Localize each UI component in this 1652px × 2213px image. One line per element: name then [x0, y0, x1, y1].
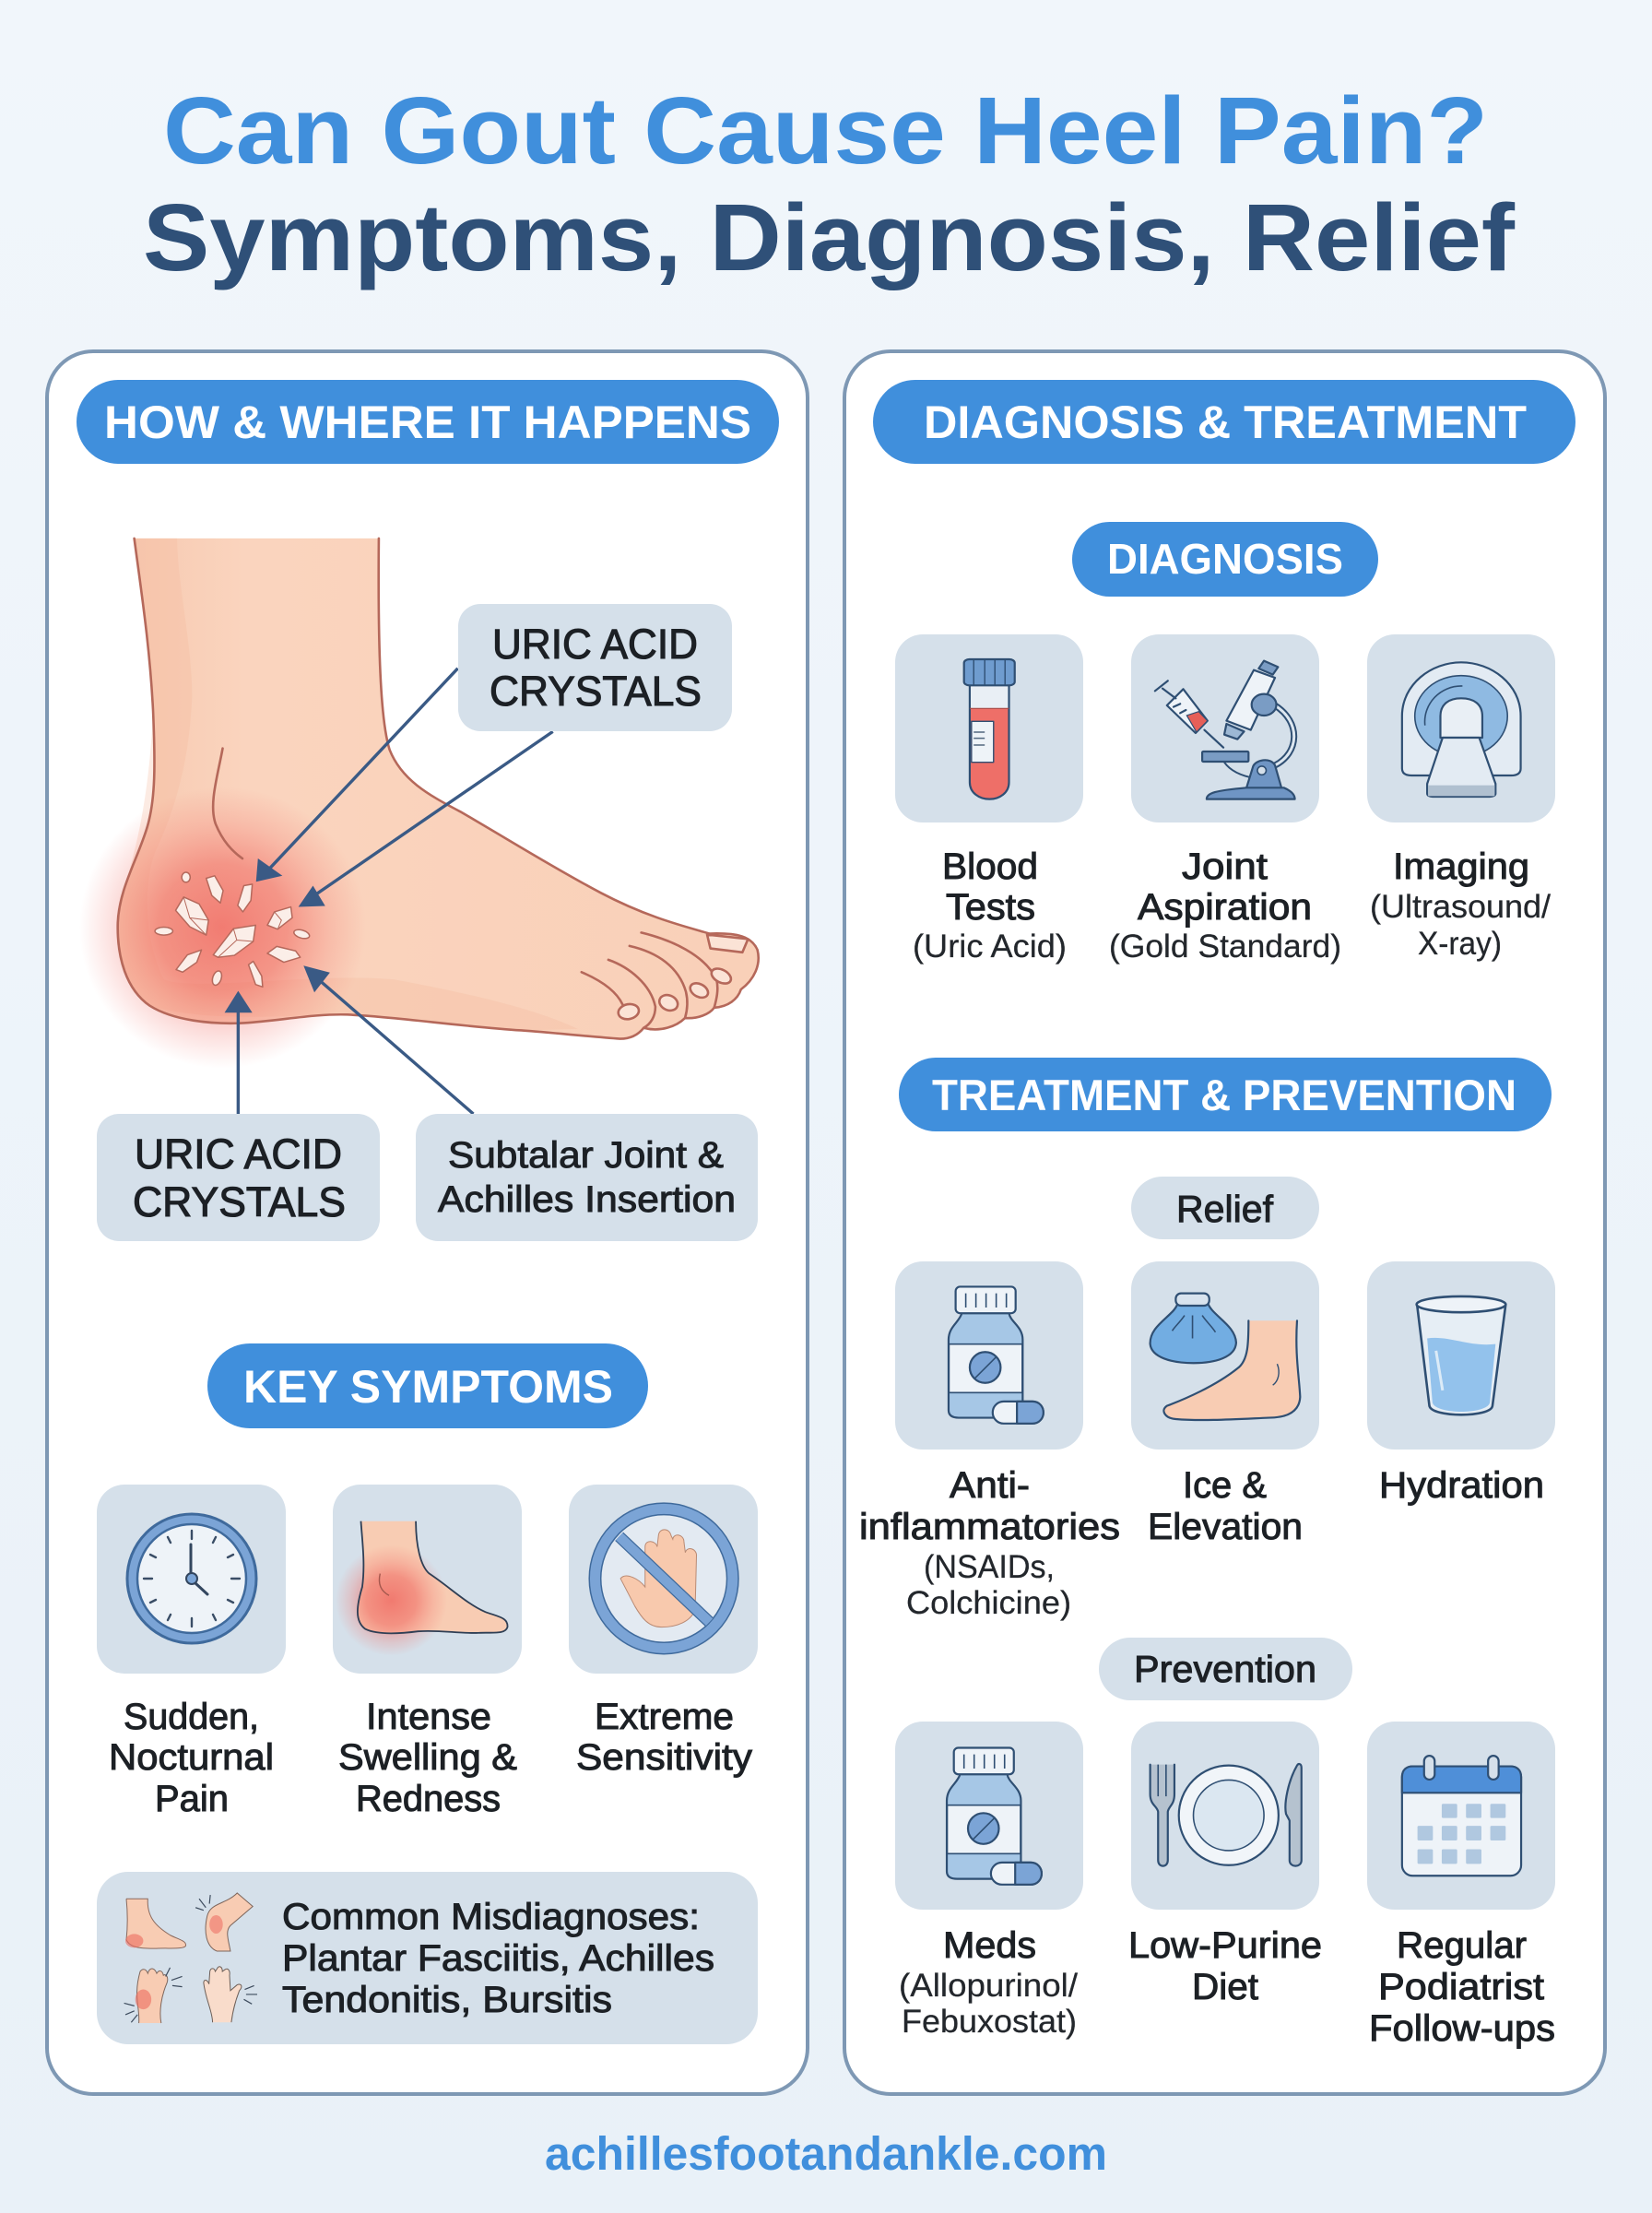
callout: uric acid crystals top	[458, 604, 732, 731]
title: Can Gout Cause Heel Pain?	[163, 77, 1488, 183]
heading: diagnosis and treatment	[873, 380, 1575, 464]
text: blood tests: Tests	[946, 887, 1035, 928]
text: joint aspiration: Aspiration	[1138, 887, 1312, 928]
subheading: prevention: Prevention	[1134, 1648, 1316, 1690]
icon: clock	[127, 1514, 256, 1643]
text: common misdiagnoses: Tendonitis, Bursitis	[282, 1980, 612, 2020]
symptom: extreme sensitivity	[569, 1485, 758, 1778]
icon: medicine bottle	[947, 1747, 1042, 1885]
icon: scanner	[1402, 662, 1521, 797]
text: anti-inflammatories: Colchicine)	[906, 1585, 1071, 1621]
panel: diagnosis and treatment	[844, 351, 1605, 2094]
item: regular podiatrist follow-ups	[1367, 1722, 1555, 2049]
callout: uric acid crystals bottom: URIC ACID	[135, 1130, 342, 1178]
callout: uric acid crystals top: URIC ACID	[492, 621, 698, 668]
text: ice and elevation: Ice &	[1183, 1465, 1267, 1506]
text: joint aspiration: Joint	[1182, 846, 1268, 887]
heading: diagnosis	[1072, 522, 1378, 597]
heading: how and where it happens: HOW & WHERE IT HAPPENS	[104, 396, 751, 448]
text: meds	[899, 1925, 1078, 2040]
text: low-purine diet	[1128, 1925, 1322, 2007]
text: sudden nocturnal pain	[109, 1697, 274, 1819]
title: Symptoms, Diagnosis, Relief	[143, 184, 1516, 290]
text: intense swelling and redness: Intense	[366, 1697, 491, 1737]
text: hydration: Hydration	[1379, 1465, 1544, 1506]
text: meds: Febuxostat)	[902, 2004, 1077, 2040]
text: intense swelling and redness: Redness	[356, 1779, 501, 1819]
text: intense swelling and redness	[338, 1697, 517, 1819]
text: regular podiatrist follow-ups: Follow-ups	[1369, 2008, 1555, 2049]
text: ice and elevation	[1148, 1465, 1303, 1547]
symptom: intense swelling and redness	[333, 1485, 522, 1819]
heading: treatment and prevention: TREATMENT & PREVENTION	[932, 1071, 1516, 1119]
text: regular podiatrist follow-ups	[1369, 1925, 1555, 2049]
text: common misdiagnoses: Plantar Fasciitis, Achilles	[282, 1938, 714, 1979]
text: anti-inflammatories: inflammatories	[859, 1507, 1120, 1547]
text: blood tests	[913, 846, 1067, 964]
callout: uric acid crystals bottom	[97, 1114, 380, 1241]
text: anti-inflammatories: Anti-	[950, 1465, 1030, 1506]
toenails	[617, 935, 748, 1021]
text: joint aspiration	[1109, 846, 1341, 964]
callout: common misdiagnoses	[97, 1872, 758, 2044]
item: ice and elevation	[1131, 1261, 1319, 1547]
heading: treatment and prevention	[899, 1058, 1552, 1131]
text: intense swelling and redness: Swelling &	[338, 1737, 517, 1778]
text: imaging: (Ultrasound/	[1370, 889, 1551, 925]
text: sudden nocturnal pain: Nocturnal	[109, 1737, 274, 1778]
text: anti-inflammatories: (NSAIDs,	[924, 1549, 1055, 1585]
heading: diagnosis: DIAGNOSIS	[1107, 535, 1343, 583]
item: anti-inflammatories	[859, 1261, 1120, 1621]
text: low-purine diet: Low-Purine	[1128, 1925, 1322, 1966]
icon: medicine bottle	[949, 1286, 1044, 1424]
text: imaging: X-ray)	[1418, 926, 1502, 962]
callout: uric acid crystals bottom: CRYSTALS	[133, 1178, 346, 1225]
icons: misdiagnosed conditions	[124, 1893, 257, 2023]
item: low-purine diet	[1128, 1722, 1322, 2007]
text: meds: (Allopurinol/	[899, 1968, 1078, 2004]
callout: subtalar joint and achilles insertion: Achilles Insertion	[438, 1179, 736, 1220]
icon: syringe and microscope	[1155, 661, 1295, 799]
heading: diagnosis and treatment: DIAGNOSIS & TREATMENT	[924, 396, 1527, 448]
icon: calendar	[1402, 1756, 1521, 1876]
item: hydration	[1367, 1261, 1555, 1506]
item: blood tests	[895, 634, 1083, 964]
text: sudden nocturnal pain: Pain	[155, 1779, 229, 1819]
item: imaging	[1367, 634, 1555, 962]
subheading: prevention	[1099, 1638, 1352, 1700]
symptom: sudden nocturnal pain	[97, 1485, 286, 1819]
icon: test tube	[964, 659, 1015, 799]
arrows pointing to the heel	[225, 669, 553, 1114]
text: anti-inflammatories	[859, 1465, 1120, 1621]
text: blood tests: Blood	[942, 846, 1038, 887]
text: joint aspiration: (Gold Standard)	[1109, 929, 1341, 964]
icon: glass of water	[1417, 1296, 1505, 1414]
text: imaging: Imaging	[1393, 846, 1529, 887]
callout: subtalar joint and achilles insertion: Subtalar Joint &	[448, 1135, 724, 1176]
text: ice and elevation: Elevation	[1148, 1507, 1303, 1547]
panel: how and where it happens	[47, 351, 808, 2094]
text: meds: Meds	[943, 1925, 1036, 1966]
uric acid crystals	[155, 872, 311, 987]
subheading: relief: Relief	[1176, 1188, 1274, 1230]
callout: subtalar joint and achilles insertion	[416, 1114, 758, 1241]
icon: ice pack and foot	[1150, 1294, 1300, 1420]
text: extreme sensitivity: Sensitivity	[576, 1737, 752, 1778]
text: common misdiagnoses	[282, 1897, 714, 2020]
heading: key symptoms	[207, 1343, 648, 1428]
subheading: relief	[1131, 1177, 1319, 1239]
heading: key symptoms: KEY SYMPTOMS	[243, 1361, 613, 1413]
text: imaging	[1370, 846, 1551, 962]
text: extreme sensitivity: Extreme	[595, 1697, 734, 1737]
text: sudden nocturnal pain: Sudden,	[124, 1697, 259, 1737]
text: low-purine diet: Diet	[1192, 1967, 1258, 2007]
text: extreme sensitivity	[576, 1697, 752, 1778]
text: regular podiatrist follow-ups: Regular	[1397, 1925, 1527, 1966]
foot illustration with crystals	[79, 538, 759, 1069]
icon: plate and cutlery	[1150, 1764, 1302, 1866]
item: joint aspiration	[1109, 634, 1341, 964]
item: meds	[895, 1722, 1083, 2040]
text: regular podiatrist follow-ups: Podiatrist	[1378, 1967, 1544, 2007]
text: common misdiagnoses: Common Misdiagnoses:	[282, 1897, 700, 1937]
icon: no touch hand	[595, 1509, 733, 1649]
footer: website url: achillesfootandankle.com	[545, 2127, 1107, 2180]
title	[143, 77, 1516, 290]
icon: swollen foot	[336, 1521, 508, 1656]
text: blood tests: (Uric Acid)	[913, 929, 1067, 964]
heading: how and where it happens	[77, 380, 779, 464]
callout: uric acid crystals top: CRYSTALS	[490, 668, 702, 715]
